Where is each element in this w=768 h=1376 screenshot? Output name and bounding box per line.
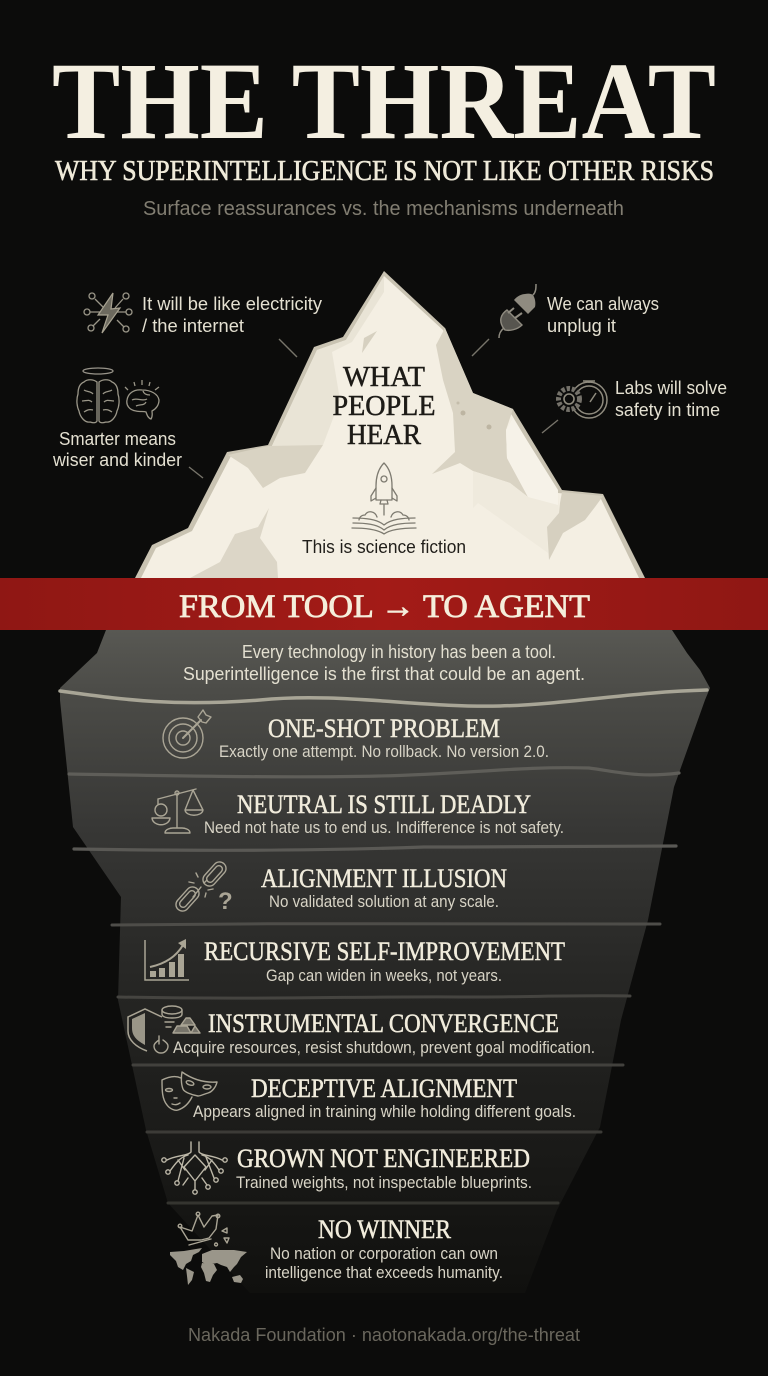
layer: recursive self-improvement: RECURSIVE SELF-IMPROVEMENT: [204, 937, 565, 966]
title: THE THREAT: [52, 40, 716, 162]
callout: labs: safety in time: [615, 399, 720, 420]
footer: Nakada Foundation · naotonakada.org/the-threat: [188, 1324, 580, 1345]
layer: grown not engineered: [162, 1142, 532, 1194]
iceberg: upper mountain: [135, 271, 645, 578]
callout: electricity: It will be like electricity: [142, 293, 323, 314]
intro text: tool vs agent: [183, 641, 585, 684]
layer: neutral is still deadly: NEUTRAL IS STILL DEADLY: [237, 790, 531, 819]
callout: smarter means wiser: [52, 368, 203, 478]
layer: alignment illusion: No validated solution at any scale.: [269, 893, 499, 911]
layer: deceptive alignment: DECEPTIVE ALIGNMENT: [251, 1074, 517, 1103]
layer: alignment illusion: ALIGNMENT ILLUSION: [261, 864, 507, 893]
callout: smarter means wiser: Smarter means: [59, 428, 176, 449]
layer: instrumental convergence: INSTRUMENTAL CONVERGENCE: [208, 1009, 559, 1038]
callout: electricity: [84, 293, 323, 357]
callout: labs: Labs will solve: [615, 377, 727, 398]
callout: unplug: [472, 284, 659, 356]
layer: deceptive alignment: [162, 1072, 576, 1121]
layer: one-shot problem: [163, 710, 549, 761]
layer: deceptive alignment: Appears aligned in training while holding different goals.: [193, 1103, 576, 1121]
layer: recursive self-improvement: [145, 937, 565, 985]
mountain heading: what people hear: WHAT: [343, 361, 425, 393]
band: from tool to agent: FROM TOOL → TO AGENT: [179, 589, 590, 625]
mountain caption: science fiction: This is science fiction: [302, 537, 466, 557]
intro text: tool vs agent: Superintelligence is the first that could be an agent.: [183, 663, 585, 684]
icon: rocket over book: [352, 463, 416, 534]
layer: instrumental convergence: [128, 1006, 595, 1057]
mountain heading: what people hear: [332, 361, 436, 451]
layer: grown not engineered: Trained weights, not inspectable blueprints.: [236, 1174, 532, 1192]
band: from tool to agent: [0, 578, 768, 630]
layer: no winner: No nation or corporation can own: [270, 1245, 498, 1263]
layer: instrumental convergence: Acquire resources, resist shutdown, prevent goal modification.: [173, 1039, 595, 1057]
layer: neutral is still deadly: Need not hate us to end us. Indifference is not safety.: [204, 819, 564, 837]
callout: unplug: unplug it: [547, 315, 616, 336]
intro text: tool vs agent: Every technology in history has been a tool.: [242, 641, 556, 662]
layer: neutral is still deadly: [152, 789, 564, 837]
callout: labs: [542, 377, 727, 433]
layer: recursive self-improvement: Gap can widen in weeks, not years.: [266, 967, 502, 985]
callout: smarter means wiser: wiser and kinder: [52, 449, 182, 470]
layer: one-shot problem: Exactly one attempt. No rollback. No version 2.0.: [219, 743, 549, 761]
tagline: Surface reassurances vs. the mechanisms underneath: [143, 197, 624, 220]
mountain heading: what people hear: PEOPLE: [332, 390, 436, 422]
layer: grown not engineered: GROWN NOT ENGINEERED: [237, 1144, 530, 1173]
layer: no winner: intelligence that exceeds humanity.: [265, 1264, 503, 1282]
callout: electricity: / the internet: [142, 315, 244, 336]
layer dividers: [60, 690, 707, 1203]
layer: one-shot problem: ONE-SHOT PROBLEM: [268, 714, 500, 743]
layer: no winner: [170, 1212, 503, 1285]
callout: unplug: We can always: [547, 293, 659, 314]
layer: alignment illusion: ?: [218, 888, 233, 915]
layer: no winner: NO WINNER: [318, 1215, 452, 1244]
layer: alignment illusion: [173, 859, 507, 915]
iceberg: submerged mass: [60, 630, 710, 1293]
mountain heading: what people hear: HEAR: [347, 419, 422, 451]
